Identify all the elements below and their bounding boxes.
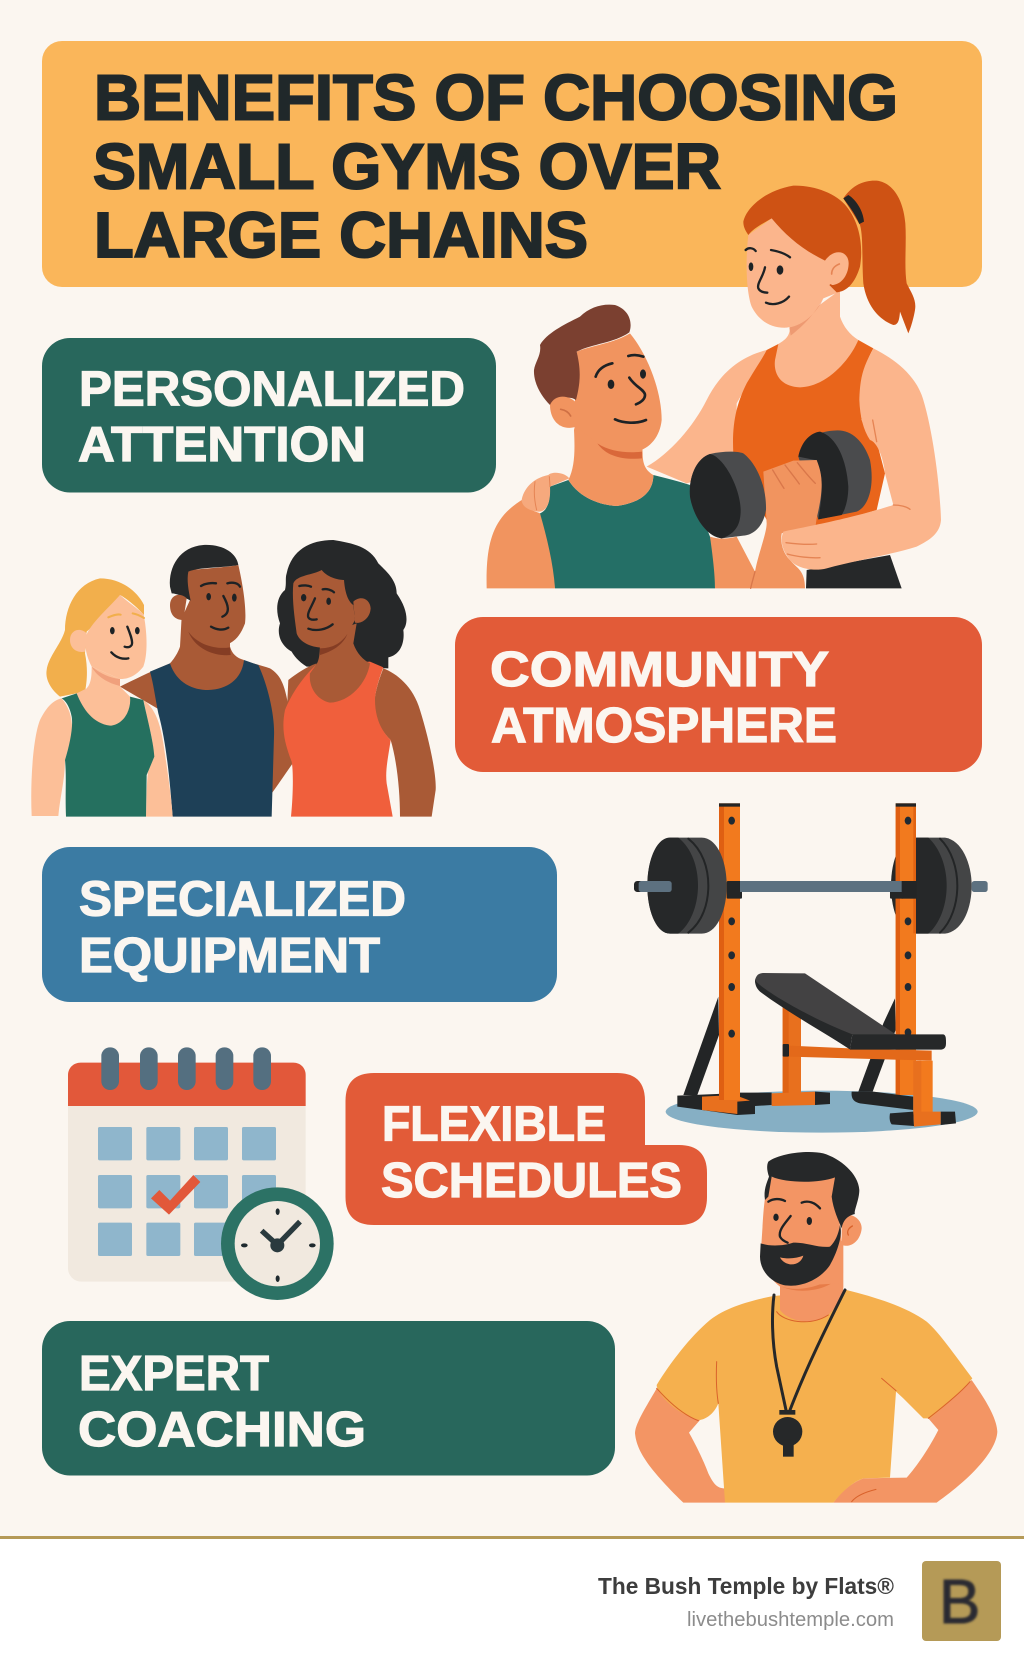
panel: community atmosphere: ATMOSPHERE bbox=[491, 699, 837, 753]
illustration: trainer helping man lift dumbbell bbox=[487, 181, 941, 588]
panel: flexible schedules bbox=[346, 1073, 707, 1225]
logo bbox=[922, 1561, 1001, 1641]
footer brand name: The Bush Temple by Flats® bbox=[598, 1573, 894, 1599]
panel: expert coaching: COACHING bbox=[78, 1403, 366, 1457]
panel: expert coaching: EXPERT bbox=[79, 1347, 269, 1401]
panel: personalized attention: ATTENTION bbox=[78, 418, 366, 472]
panel: specialized equipment: EQUIPMENT bbox=[79, 929, 380, 983]
panel: specialized equipment bbox=[42, 847, 557, 1002]
title bbox=[93, 62, 898, 271]
footer website: livethebushtemple.com bbox=[687, 1609, 894, 1631]
illustration: squat rack and bench bbox=[634, 803, 988, 1133]
panel: expert coaching bbox=[42, 1321, 615, 1476]
title: BENEFITS OF CHOOSING bbox=[94, 62, 898, 134]
illustration: coach with whistle bbox=[635, 1152, 997, 1503]
panel: personalized attention: PERSONALIZED bbox=[79, 362, 465, 416]
icon: calendar with clock bbox=[68, 1047, 334, 1300]
panel: specialized equipment: SPECIALIZED bbox=[79, 872, 406, 926]
title: LARGE CHAINS bbox=[94, 199, 588, 271]
panel: community atmosphere: COMMUNITY bbox=[490, 643, 829, 697]
panel: flexible schedules: SCHEDULES bbox=[381, 1154, 682, 1208]
footer bbox=[0, 1536, 1024, 1666]
title: SMALL GYMS OVER bbox=[93, 130, 721, 202]
logo: B bbox=[939, 1568, 980, 1637]
illustration: group of three gym members bbox=[31, 540, 436, 817]
panel: flexible schedules: FLEXIBLE bbox=[382, 1098, 606, 1152]
panel: community atmosphere bbox=[455, 617, 982, 772]
panel: personalized attention bbox=[42, 338, 496, 492]
title panel bbox=[42, 41, 982, 287]
